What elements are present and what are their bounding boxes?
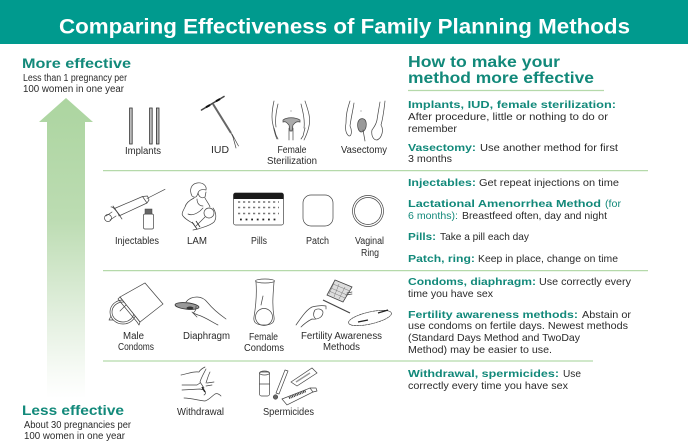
text: patch, ring: Keep in place, change on time xyxy=(478,253,618,265)
row dividers xyxy=(103,171,648,361)
icon: pills xyxy=(234,193,284,247)
text: condoms, diaphragm: time you have sex xyxy=(408,288,494,300)
header banner xyxy=(0,0,688,44)
icon: pills: Pills xyxy=(251,236,267,247)
text: fertility awareness methods xyxy=(408,309,632,356)
text: patch, ring xyxy=(408,253,618,265)
text: withdrawal, spermicides xyxy=(408,368,581,392)
text: lactational amenorrhea method xyxy=(408,198,622,222)
text: withdrawal, spermicides: Withdrawal, spermicides: xyxy=(408,368,559,380)
panel: how to make your method more effective xyxy=(408,54,632,392)
icon: LAM xyxy=(182,183,216,247)
panel: bottom tier methods xyxy=(177,367,317,418)
icon: female condom xyxy=(244,279,284,354)
icon: diaphragm: Diaphragm xyxy=(183,331,230,342)
icon: patch: Patch xyxy=(306,236,329,247)
icon: spermicides: Spermicides xyxy=(263,407,314,418)
text: lactational amenorrhea method: 6 months): xyxy=(408,210,458,222)
heading: method more effective xyxy=(408,70,594,87)
icon: implants xyxy=(125,108,161,157)
more effective label xyxy=(22,55,131,95)
less effective label: About 30 pregnancies per xyxy=(24,420,132,431)
text: pills: Pills: xyxy=(408,231,436,243)
icon: male condoms xyxy=(109,283,163,353)
text: condoms, diaphragm: Use correctly every xyxy=(539,276,632,288)
text: vasectomy: Use another method for first xyxy=(480,142,618,154)
panel: top tier methods xyxy=(125,96,387,167)
more effective label: Less than 1 pregnancy per xyxy=(23,73,128,84)
panel: second tier methods xyxy=(104,183,384,259)
icon: implants: Implants xyxy=(125,146,161,157)
icon: withdrawal: Withdrawal xyxy=(177,407,224,418)
effectiveness arrow xyxy=(39,98,93,398)
text: injectables: Get repeat injections on time xyxy=(479,177,619,189)
icon: vaginal ring xyxy=(352,196,384,259)
icon: LAM: LAM xyxy=(187,236,207,247)
icon: fertility awareness: Fertility Awareness xyxy=(301,331,382,342)
icon: female sterilization: Sterilization xyxy=(267,156,317,167)
title: Comparing Effectiveness of Family Planning Methods xyxy=(59,14,630,38)
icon: injectables: Injectables xyxy=(115,236,159,247)
panel: third tier methods xyxy=(109,279,393,354)
text: patch, ring: Patch, ring: xyxy=(408,253,475,265)
less effective label xyxy=(22,402,132,441)
text: withdrawal, spermicides: Use xyxy=(563,368,581,380)
heading: How to make your xyxy=(408,54,560,71)
icon: male condoms: Male xyxy=(123,331,144,342)
text: long-acting methods: remember xyxy=(408,123,458,135)
icon: IUD xyxy=(202,96,238,156)
more effective label: 100 women in one year xyxy=(23,84,125,95)
text: withdrawal, spermicides: correctly every time you have sex xyxy=(408,380,569,392)
text: injectables: Injectables: xyxy=(408,177,476,189)
icon: fertility awareness xyxy=(296,280,393,353)
text: fertility awareness methods: Method) may be easier to use. xyxy=(408,344,552,356)
text: vasectomy: 3 months xyxy=(408,153,452,165)
text: pills: Take a pill each day xyxy=(440,231,530,243)
icon: injectables xyxy=(104,189,165,247)
text: condoms, diaphragm: Condoms, diaphragm: xyxy=(408,276,536,288)
icon: female sterilization xyxy=(267,101,317,167)
icon: fertility awareness: Methods xyxy=(323,342,360,353)
icon: female sterilization: Female xyxy=(278,145,307,156)
icon: vaginal ring: Vaginal xyxy=(355,236,384,247)
less effective label: Less effective xyxy=(22,402,124,418)
text: fertility awareness methods: Abstain or xyxy=(582,309,632,321)
icon: male condoms: Condoms xyxy=(118,342,154,353)
icon: vaginal ring: Ring xyxy=(361,248,379,259)
text: long-acting methods: Implants, IUD, female sterilization: xyxy=(408,99,616,111)
text: vasectomy: Vasectomy: xyxy=(408,142,476,154)
more effective label: More effective xyxy=(22,55,131,71)
icon: vasectomy: Vasectomy xyxy=(341,145,387,156)
text: fertility awareness methods: Fertility awareness methods: xyxy=(408,309,578,321)
text: vasectomy xyxy=(408,142,618,165)
icon: diaphragm xyxy=(175,297,230,342)
text: lactational amenorrhea method: Lactational Amenorrhea Method xyxy=(408,198,601,210)
text: condoms, diaphragm xyxy=(408,276,632,300)
icon: female condom: Condoms xyxy=(244,343,284,354)
text: lactational amenorrhea method: Breastfeed often, day and night xyxy=(462,210,607,222)
text: fertility awareness methods: (Standard Days Method and TwoDay xyxy=(408,332,581,344)
icon: female condom: Female xyxy=(249,332,278,343)
text: long-acting methods: After procedure, little or nothing to do or xyxy=(408,111,609,123)
text: fertility awareness methods: use condoms on fertile days. Newest methods xyxy=(408,320,628,332)
icon: vasectomy xyxy=(341,101,387,156)
heading xyxy=(408,54,604,90)
icon: patch xyxy=(303,195,333,247)
text: injectables xyxy=(408,177,619,189)
text: lactational amenorrhea method: (for xyxy=(605,198,622,210)
text: long-acting methods xyxy=(408,99,616,135)
icon: IUD: IUD xyxy=(211,145,229,156)
